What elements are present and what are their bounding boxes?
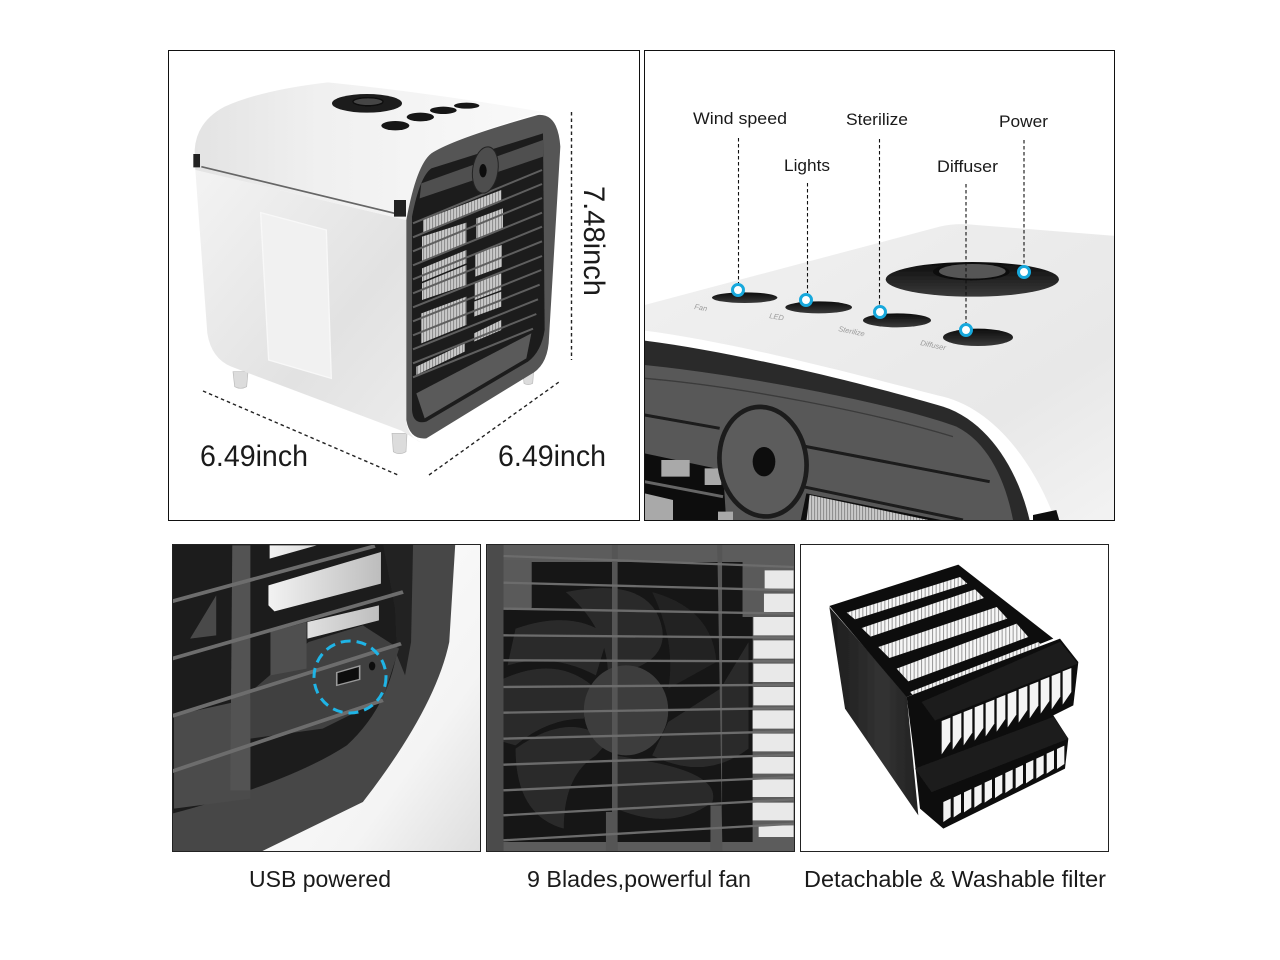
blades [503, 588, 749, 829]
lower tray lid [915, 717, 1068, 792]
top slats [847, 577, 1044, 697]
panel: controls [644, 50, 1116, 525]
panel: dimensions [168, 50, 640, 520]
top louvre [420, 140, 543, 198]
frame [172, 544, 455, 852]
label: depth: 6.49inch [498, 440, 606, 473]
label: power: Power [999, 112, 1048, 131]
dimension: height line [570, 112, 572, 360]
frame inner dark band [394, 545, 413, 675]
button: sterilize [863, 313, 931, 327]
printed button labels: Fan [694, 302, 708, 313]
control buttons [332, 94, 402, 113]
printed button labels: Sterilize [838, 324, 866, 339]
infographic: air cooler product sheet [168, 50, 1115, 892]
caption: filter: Detachable & Washable filter [804, 866, 1106, 892]
printed button labels: Diffuser [920, 338, 947, 352]
side wall [829, 607, 918, 815]
top surface [645, 224, 1116, 523]
body side [195, 170, 421, 443]
front frame [406, 115, 560, 438]
louvre panel [645, 365, 1014, 523]
grill bars [503, 556, 794, 840]
label: width: 6.49inch [200, 440, 308, 473]
label: lights: Lights [784, 156, 830, 175]
callout dots [732, 266, 1030, 336]
button: fan [712, 292, 777, 303]
dimension: depth line [429, 382, 559, 475]
knob [717, 404, 809, 519]
legs [233, 372, 534, 454]
upper tray lid [922, 642, 1078, 720]
vertical ribs [606, 544, 722, 854]
panel: fan [486, 544, 796, 854]
body top [194, 82, 480, 220]
fan cavity [503, 562, 753, 842]
grill opening left [645, 453, 726, 523]
label: diffuser: Diffuser [937, 157, 998, 176]
photo: USB port close-up [172, 544, 481, 852]
edge highlight [645, 331, 1056, 523]
button: diffuser [943, 329, 1013, 346]
caption: USB powered: USB powered [249, 866, 391, 892]
vertical column [230, 545, 250, 790]
lower tray pleats [943, 746, 1064, 822]
knob [472, 146, 499, 194]
grill interior [173, 545, 397, 814]
back of trays [907, 639, 1078, 829]
white body shading [258, 544, 481, 852]
USB socket [337, 666, 360, 685]
frame [487, 544, 796, 854]
dark frame [645, 341, 1030, 523]
printed button labels [694, 302, 947, 352]
white filter blocks [268, 545, 381, 639]
lid seam and clips [201, 167, 395, 213]
label: wind speed: Wind speed [693, 109, 787, 128]
callout leader lines [738, 138, 1024, 323]
printed button labels: LED [769, 311, 785, 323]
upper tray pleats [942, 668, 1071, 754]
top face [829, 565, 1053, 697]
hub [584, 665, 668, 755]
inner grey plates [250, 625, 399, 739]
device: cooler 3D view [193, 82, 560, 454]
dimension: width line [203, 391, 398, 475]
caption: fan: 9 Blades,powerful fan [527, 866, 751, 892]
white filter strip [753, 570, 794, 837]
button: power ring [886, 262, 1059, 297]
grooves [645, 415, 990, 520]
filter blocks [416, 190, 503, 375]
bottom louvre [416, 333, 531, 418]
indicator hole [369, 662, 375, 670]
louvre rails [172, 546, 403, 771]
side frame bits [503, 560, 764, 612]
button: LED [785, 301, 852, 313]
side window [261, 213, 331, 378]
panel: filter [800, 544, 1108, 852]
panel: USB powered [172, 544, 481, 852]
device: top close-up [645, 224, 1116, 525]
dashed highlight circle [314, 641, 386, 713]
louvre lines [413, 170, 542, 377]
latch [1033, 510, 1060, 520]
grill interior [412, 133, 545, 422]
photo: filter cube [829, 565, 1078, 829]
label: sterilize: Sterilize [846, 110, 908, 129]
grill opening right [800, 494, 941, 520]
label: height: 7.48inch [577, 186, 610, 296]
photo: fan close-up [487, 544, 796, 854]
